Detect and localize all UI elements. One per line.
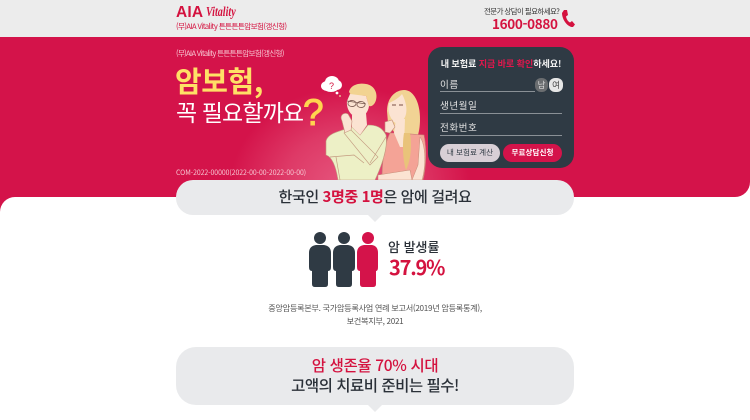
logo: Vitality (206, 5, 236, 20)
hero panel (0, 37, 750, 197)
compliance code: COM-2022-00000(2022-00-00-2022-00-00) (176, 167, 306, 177)
form panel (428, 47, 574, 168)
source note: 보건복지부, 2021 (347, 315, 403, 327)
thought bubble: ? (329, 81, 334, 91)
pointer 1 (368, 215, 382, 222)
callout: one in three: 한국인 3명중 1명은 암에 걸려요 (279, 186, 471, 207)
gender female: 여 (552, 79, 560, 91)
gender female (549, 78, 563, 92)
stat label: 암 발생률 (388, 237, 439, 256)
button calculate: 내 보험료 계산 (447, 147, 493, 158)
button consult: 무료상담신청 (512, 147, 553, 158)
hero small title: (무)AIA Vitality 튼튼튼튼암보험(갱신형) (176, 48, 284, 59)
button calculate (440, 144, 500, 162)
phone field: 전화번호 (440, 120, 477, 134)
button consult (503, 144, 562, 162)
icon: phone (562, 10, 575, 27)
stat value: 37.9% (389, 252, 444, 281)
hero headline yellow: 암보험, (175, 59, 263, 101)
callout red line: 암 생존율 70% 시대 (312, 354, 438, 376)
gender male: 남 (538, 79, 545, 91)
name field: 이름 (440, 77, 459, 91)
source note (268, 302, 482, 327)
woman (378, 90, 426, 180)
callout dark line: 고액의 치료비 준비는 필수! (291, 374, 459, 396)
question mark: ? (303, 92, 324, 133)
logo (176, 4, 236, 21)
white body corner (0, 197, 15, 212)
form title: 내 보험료 지금 바로 확인하세요! (441, 56, 561, 70)
phone text: 전문가 상담이 필요하세요? (484, 6, 559, 17)
illustration: couple (321, 76, 426, 180)
hero headline white: 꼭 필요할까요 (176, 94, 303, 128)
callout: survival rate (176, 347, 574, 405)
source note: 중앙암등록본부. 국가암등록사업 연례 보고서(2019년 암등록통계), (268, 302, 482, 314)
man (326, 84, 386, 180)
chart: three people pictogram (309, 232, 378, 287)
birth field: 생년월일 (440, 98, 477, 112)
header bar (0, 0, 750, 37)
gender male (535, 78, 548, 92)
callout: one in three (176, 180, 574, 215)
logo: AIA (176, 4, 203, 21)
product name: (무)AIA Vitality 튼튼튼튼암보험(갱신형) (176, 21, 286, 32)
phone number: 1600-0880 (492, 13, 558, 33)
pointer 2 (368, 405, 382, 412)
